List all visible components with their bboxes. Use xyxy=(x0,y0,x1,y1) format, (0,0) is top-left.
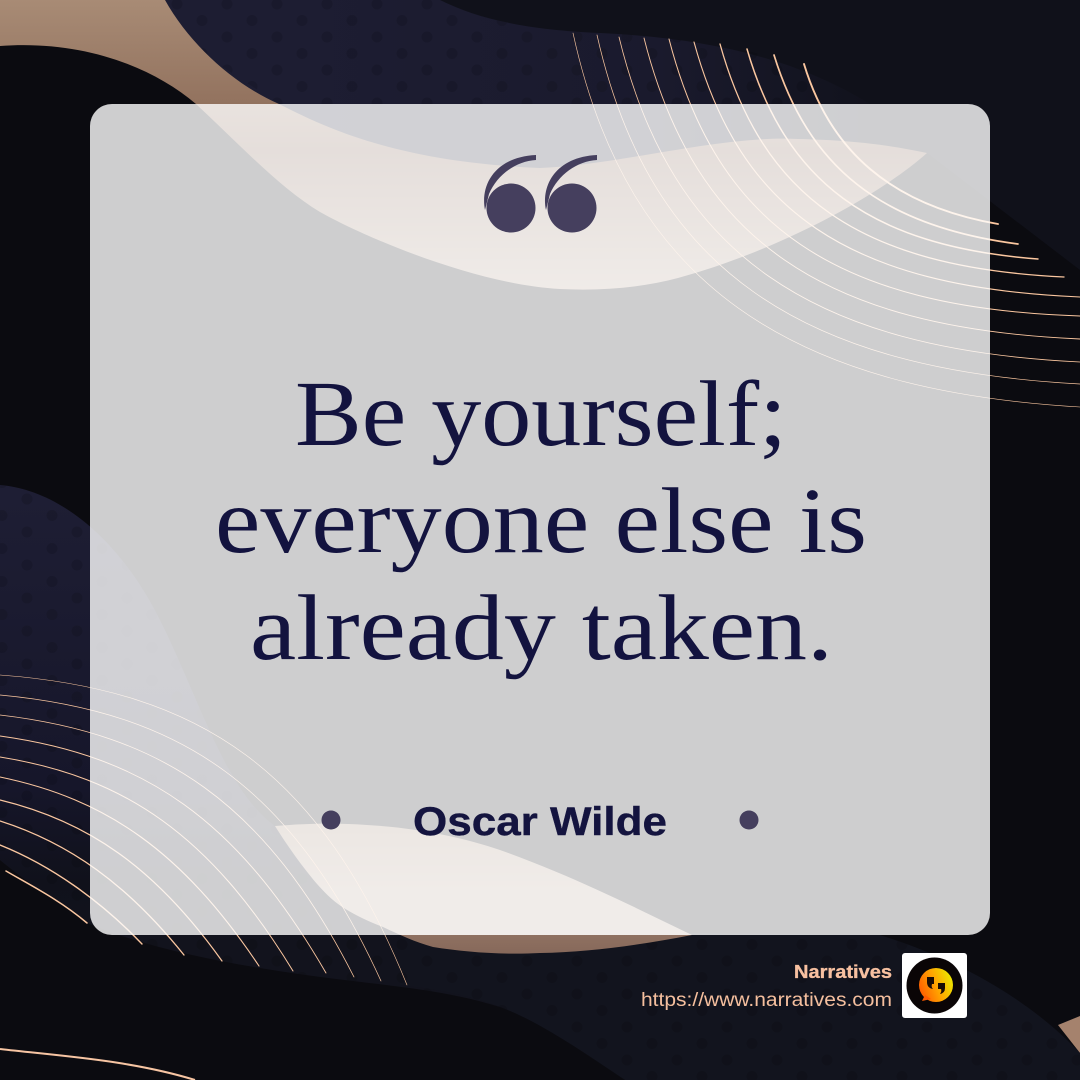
shape: tan wave top xyxy=(0,0,927,290)
shape: tan wave bottom xyxy=(275,824,692,954)
brand name: Narratives xyxy=(794,962,892,982)
panel: quote card xyxy=(90,104,990,935)
brand url: https://www.narratives.com xyxy=(641,990,892,1011)
icon: opening quotation mark xyxy=(484,155,597,232)
icon: brand logo xyxy=(902,953,967,1018)
quote text: already taken. xyxy=(250,577,833,680)
line art: bottom left arcs xyxy=(0,675,407,985)
quote text: Be yourself; xyxy=(295,363,787,466)
shape: top right dark xyxy=(430,0,1080,270)
right dot xyxy=(740,810,758,830)
quote text xyxy=(215,363,867,680)
left dot xyxy=(322,810,340,830)
shape: bottom right corner tan xyxy=(1058,1016,1080,1053)
shape: bottom navy xyxy=(400,930,1080,1080)
line art: top right arcs xyxy=(573,33,1080,407)
line art: bottom left accent stroke xyxy=(0,1049,195,1080)
shape: left navy xyxy=(0,485,500,1007)
quote text: everyone else is xyxy=(215,470,867,573)
shape: top navy xyxy=(120,0,927,200)
author line xyxy=(322,800,758,844)
author name: Oscar Wilde xyxy=(413,800,667,844)
